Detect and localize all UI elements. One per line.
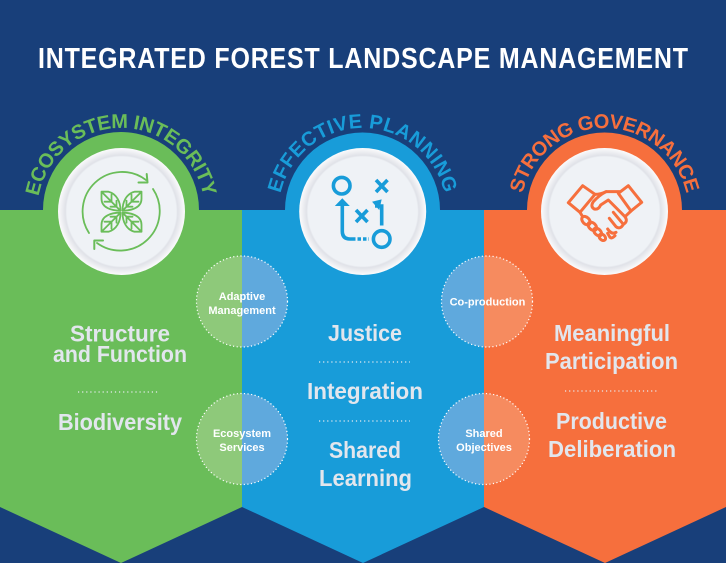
- panel: effective planning: [242, 114, 484, 563]
- text: structure and function: [53, 320, 187, 367]
- text: shared learning: Learning: [319, 465, 412, 491]
- overlap: shared objectives: Shared: [465, 428, 503, 440]
- overlap: adaptive management: [196, 256, 288, 347]
- overlap: ecosystem services: [196, 394, 288, 484]
- overlap: ecosystem services: Ecosystem: [213, 428, 271, 440]
- overlap: co-production: Co-production: [450, 296, 526, 308]
- text: structure and function: and Function: [53, 341, 187, 367]
- overlap: co-production: [442, 256, 533, 347]
- text: integration: Integration: [307, 378, 423, 404]
- text: productive deliberation: Deliberation: [548, 436, 676, 462]
- overlap: adaptive management: Management: [208, 305, 276, 317]
- text: meaningful participation: Meaningful: [554, 320, 670, 346]
- heading: ecosystem integrity: ECOSYSTEM INTEGRITY: [25, 114, 217, 195]
- text: structure and function: Structure: [70, 320, 170, 346]
- overlap: shared objectives: Objectives: [456, 442, 512, 454]
- text: productive deliberation: [548, 408, 676, 462]
- text: justice: Justice: [328, 320, 402, 346]
- badge: ecosystem: [58, 148, 185, 275]
- icon: handshake: [568, 186, 642, 242]
- panel: strong governance: [484, 114, 726, 563]
- text: meaningful participation: Participation: [545, 348, 678, 374]
- overlap: adaptive management: Adaptive: [219, 291, 265, 303]
- text: productive deliberation: Productive: [556, 408, 667, 434]
- overlap: shared objectives: [438, 394, 530, 484]
- panel: ecosystem integrity: [0, 114, 242, 563]
- text: meaningful participation: [545, 320, 678, 374]
- icon: leaves and cycle arrows: [83, 172, 160, 251]
- title: INTEGRATED FOREST LANDSCAPE MANAGEMENT: [38, 42, 688, 74]
- text: shared learning: [319, 437, 412, 491]
- icon: strategy plan: [333, 177, 390, 247]
- heading: strong governance: STRONG GOVERNANCE: [510, 114, 700, 193]
- badge: planning: [299, 148, 426, 275]
- overlap: ecosystem services: Services: [219, 442, 265, 454]
- heading: effective planning: EFFECTIVE PLANNING: [268, 114, 456, 192]
- text: shared learning: Shared: [329, 437, 401, 463]
- text: biodiversity: Biodiversity: [58, 409, 182, 435]
- badge: governance: [541, 148, 668, 275]
